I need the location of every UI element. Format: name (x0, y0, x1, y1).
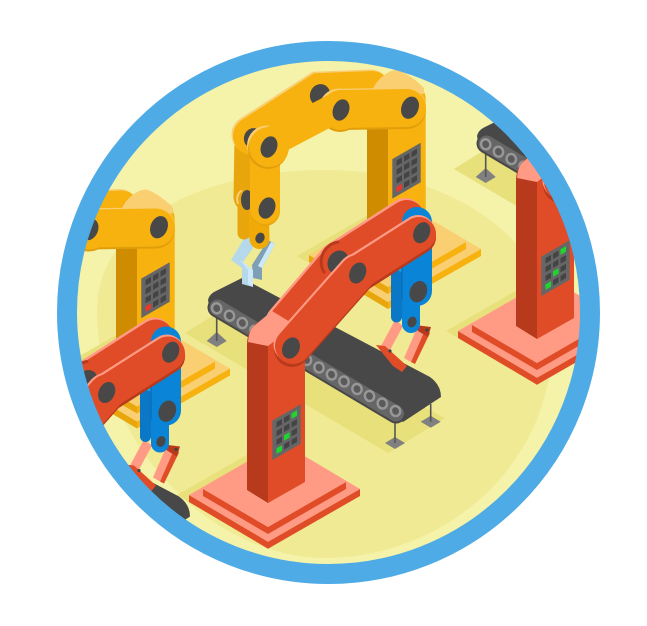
front links (247, 88, 422, 245)
orange robot and conveyor (207, 70, 481, 449)
left production cell (82, 189, 230, 520)
red robot column (247, 311, 305, 503)
right production cell (458, 122, 580, 385)
conveyor belt (207, 278, 441, 449)
orange robot arm (237, 70, 424, 245)
red gripper (376, 320, 431, 372)
orange robot base (309, 202, 481, 309)
back links (237, 70, 424, 233)
blue robot gripper arm (376, 222, 431, 372)
orange robot column (367, 84, 426, 263)
belt top (208, 278, 441, 422)
red back link and blue gripper arm (284, 216, 431, 372)
illustration: robot factory badge (57, 41, 600, 584)
red robot front arm (279, 219, 434, 362)
floor shadows: left cell (80, 335, 131, 425)
belt side (218, 308, 396, 414)
red control panel (272, 404, 301, 460)
blue ring (67, 51, 590, 574)
orange control panel (392, 143, 421, 199)
conveyor legs (207, 318, 441, 449)
floor shadows (177, 203, 480, 549)
floor shadows: right cell (446, 152, 576, 385)
main production cell (189, 70, 481, 549)
red robot back arm link (284, 216, 407, 324)
light blue gripper (231, 232, 275, 287)
belt wheels (209, 300, 403, 419)
clipped scene (57, 41, 600, 584)
background disc (74, 58, 584, 568)
red robot base (189, 442, 360, 549)
inner floor (97, 170, 553, 558)
blue links (396, 222, 430, 329)
